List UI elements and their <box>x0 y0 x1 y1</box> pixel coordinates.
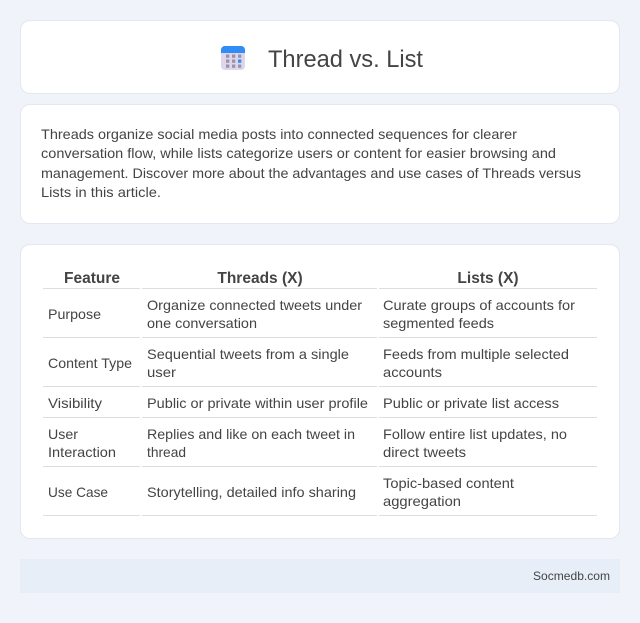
row: user interaction <box>48 426 567 460</box>
row: use case: Storytelling, detailed info sharing <box>147 484 356 500</box>
footer text: Socmedb.com <box>533 569 610 583</box>
row: purpose: Organize connected tweets under <box>147 297 362 313</box>
row: purpose: Purpose <box>48 306 101 322</box>
table header <box>64 270 519 287</box>
intro text: Threads organize social media posts into connected sequences for clearer <box>41 126 517 142</box>
row: use case <box>48 475 514 509</box>
panel: title card <box>20 20 620 94</box>
row: content type: Content Type <box>48 355 132 371</box>
row: user interaction: Interaction <box>48 444 116 460</box>
title: Thread vs. List <box>268 46 423 73</box>
row: user interaction: User <box>48 426 78 442</box>
intro text <box>41 126 581 200</box>
intro text: Lists in this article. <box>41 184 161 200</box>
row: content type <box>48 346 569 380</box>
table header: Threads (X) <box>217 270 303 287</box>
row: use case: Use Case <box>48 484 108 500</box>
row: purpose: Curate groups of accounts for <box>383 297 575 313</box>
row: user interaction: Replies and like on each tweet in <box>147 426 355 442</box>
row: user interaction: thread <box>147 444 186 460</box>
comparison table <box>43 270 597 516</box>
row: content type: user <box>147 364 176 380</box>
table header: Lists (X) <box>457 270 519 287</box>
row: user interaction: direct tweets <box>383 444 466 460</box>
icon: calendar <box>221 46 245 70</box>
row: visibility: Public or private within user profile <box>147 395 368 411</box>
intro text: conversation flow, while lists categorize users or content for easier browsing and <box>41 145 556 161</box>
intro text: management. Discover more about the advantages and use cases of Threads versus <box>41 165 581 181</box>
row: content type: accounts <box>383 364 442 380</box>
row: content type: Feeds from multiple selected <box>383 346 569 362</box>
table header: Feature <box>64 270 120 287</box>
row: visibility: Public or private list access <box>383 395 559 411</box>
panel: intro card <box>20 104 620 224</box>
row: purpose: segmented feeds <box>383 315 494 331</box>
row: use case: Topic-based content <box>383 475 514 491</box>
row: visibility <box>48 395 559 411</box>
footer bar <box>20 559 620 593</box>
row: purpose <box>48 297 575 331</box>
row: content type: Sequential tweets from a single <box>147 346 349 362</box>
row: visibility: Visibility <box>48 395 102 411</box>
row: user interaction: Follow entire list updates, no <box>383 426 567 442</box>
row: use case: aggregation <box>383 493 461 509</box>
panel: table card <box>20 244 620 539</box>
row: purpose: one conversation <box>147 315 257 331</box>
